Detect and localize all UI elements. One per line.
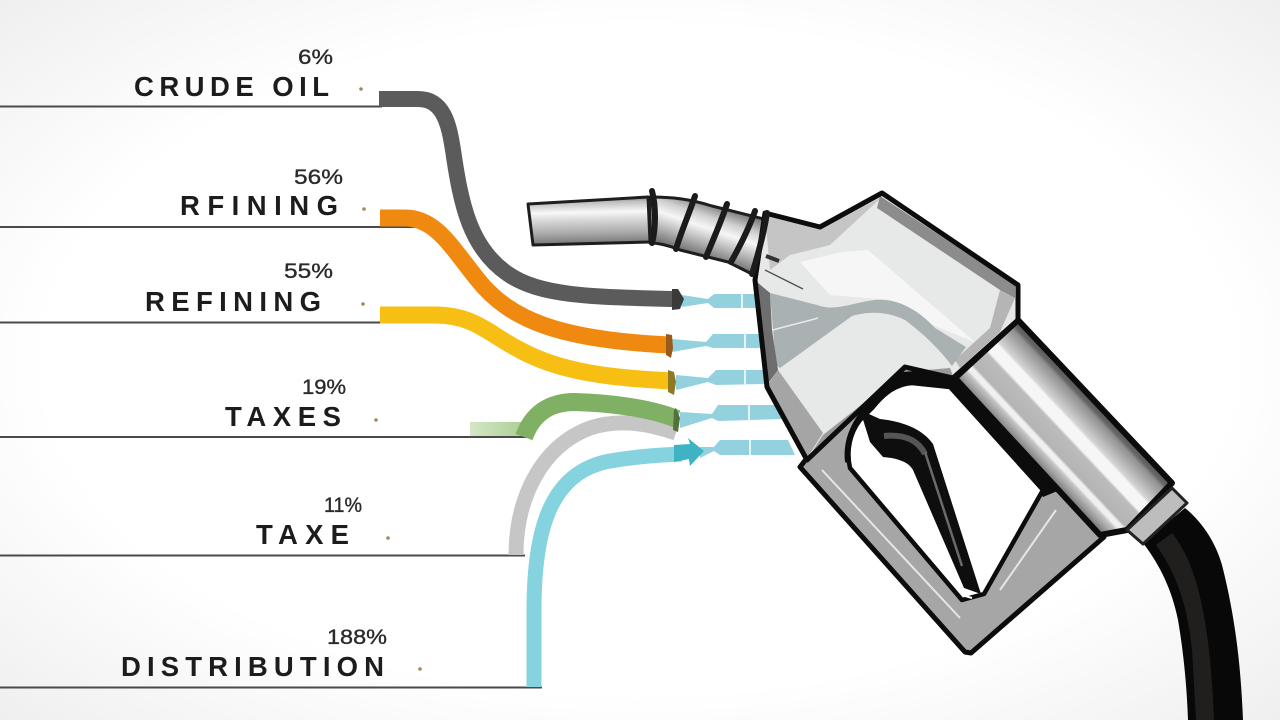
hose bbox=[1143, 508, 1243, 720]
nozzle body bbox=[755, 193, 1018, 460]
ribbon: yellow bbox=[380, 315, 676, 395]
guard opening bbox=[848, 383, 1043, 600]
label: taxe: 11% bbox=[324, 494, 362, 517]
stream 5 bbox=[700, 440, 795, 458]
ribbon: cyan bbox=[534, 438, 704, 687]
ribbon: dark gray bbox=[379, 99, 684, 310]
ribbon: light green start bbox=[470, 422, 526, 436]
outline bbox=[755, 193, 1018, 460]
handle tube bbox=[955, 320, 1172, 535]
label: rfining bbox=[180, 166, 366, 221]
guard inner black edge bbox=[845, 367, 1060, 497]
lower left facet bbox=[767, 370, 823, 458]
label: crude oil: 6% bbox=[298, 46, 333, 69]
label: rfining: RFINING bbox=[180, 190, 338, 221]
top rim bbox=[877, 196, 1015, 298]
ribbon: orange bbox=[380, 218, 673, 358]
label: crude oil bbox=[134, 46, 363, 102]
label: taxes bbox=[225, 376, 378, 432]
coil rings bbox=[652, 191, 755, 262]
collar notch bbox=[766, 256, 779, 261]
ribbon: light gray bbox=[516, 423, 676, 555]
spout bbox=[528, 197, 650, 245]
window glint bbox=[773, 318, 818, 330]
label: taxes: 19% bbox=[302, 376, 346, 399]
small neck line bbox=[765, 270, 803, 289]
right rim bbox=[955, 290, 1015, 368]
collar ring bbox=[752, 213, 767, 274]
underside band bbox=[808, 366, 953, 458]
body shading at the neck bbox=[765, 197, 882, 270]
stream 3 bbox=[676, 370, 766, 390]
trigger guard bbox=[800, 367, 1104, 653]
left dark edge bbox=[757, 282, 778, 385]
baseline rules bbox=[0, 106, 542, 688]
label: refining bbox=[145, 260, 365, 317]
label: crude oil: CRUDE OIL bbox=[134, 71, 329, 102]
panel: pale blue fuel streams bbox=[672, 294, 795, 458]
panel: cost labels bbox=[121, 46, 422, 682]
label: taxe bbox=[256, 494, 390, 550]
guard highlights bbox=[822, 470, 1056, 618]
label: refining: 55% bbox=[284, 260, 333, 283]
stream 2 bbox=[672, 334, 762, 352]
stream 1 bbox=[682, 294, 758, 308]
label: rfining: 56% bbox=[294, 166, 343, 189]
spout neck bbox=[650, 197, 768, 274]
panel: cost ribbons bbox=[379, 99, 704, 687]
stream 4 bbox=[680, 405, 782, 428]
label: distribution: DISTRIBUTION bbox=[121, 651, 384, 682]
label: taxe: TAXE bbox=[256, 519, 349, 550]
white highlight bbox=[800, 250, 975, 342]
label: distribution bbox=[121, 626, 422, 682]
label: distribution: 188% bbox=[327, 626, 387, 649]
label: refining: REFINING bbox=[145, 286, 321, 317]
icon: fuel pump nozzle bbox=[528, 191, 1243, 720]
hose highlight bbox=[1156, 533, 1214, 720]
collar bbox=[1127, 488, 1187, 544]
ribbon: green bbox=[524, 402, 680, 437]
trigger bbox=[860, 410, 981, 598]
label: taxes: TAXES bbox=[225, 401, 341, 432]
fuel window bbox=[770, 293, 966, 368]
